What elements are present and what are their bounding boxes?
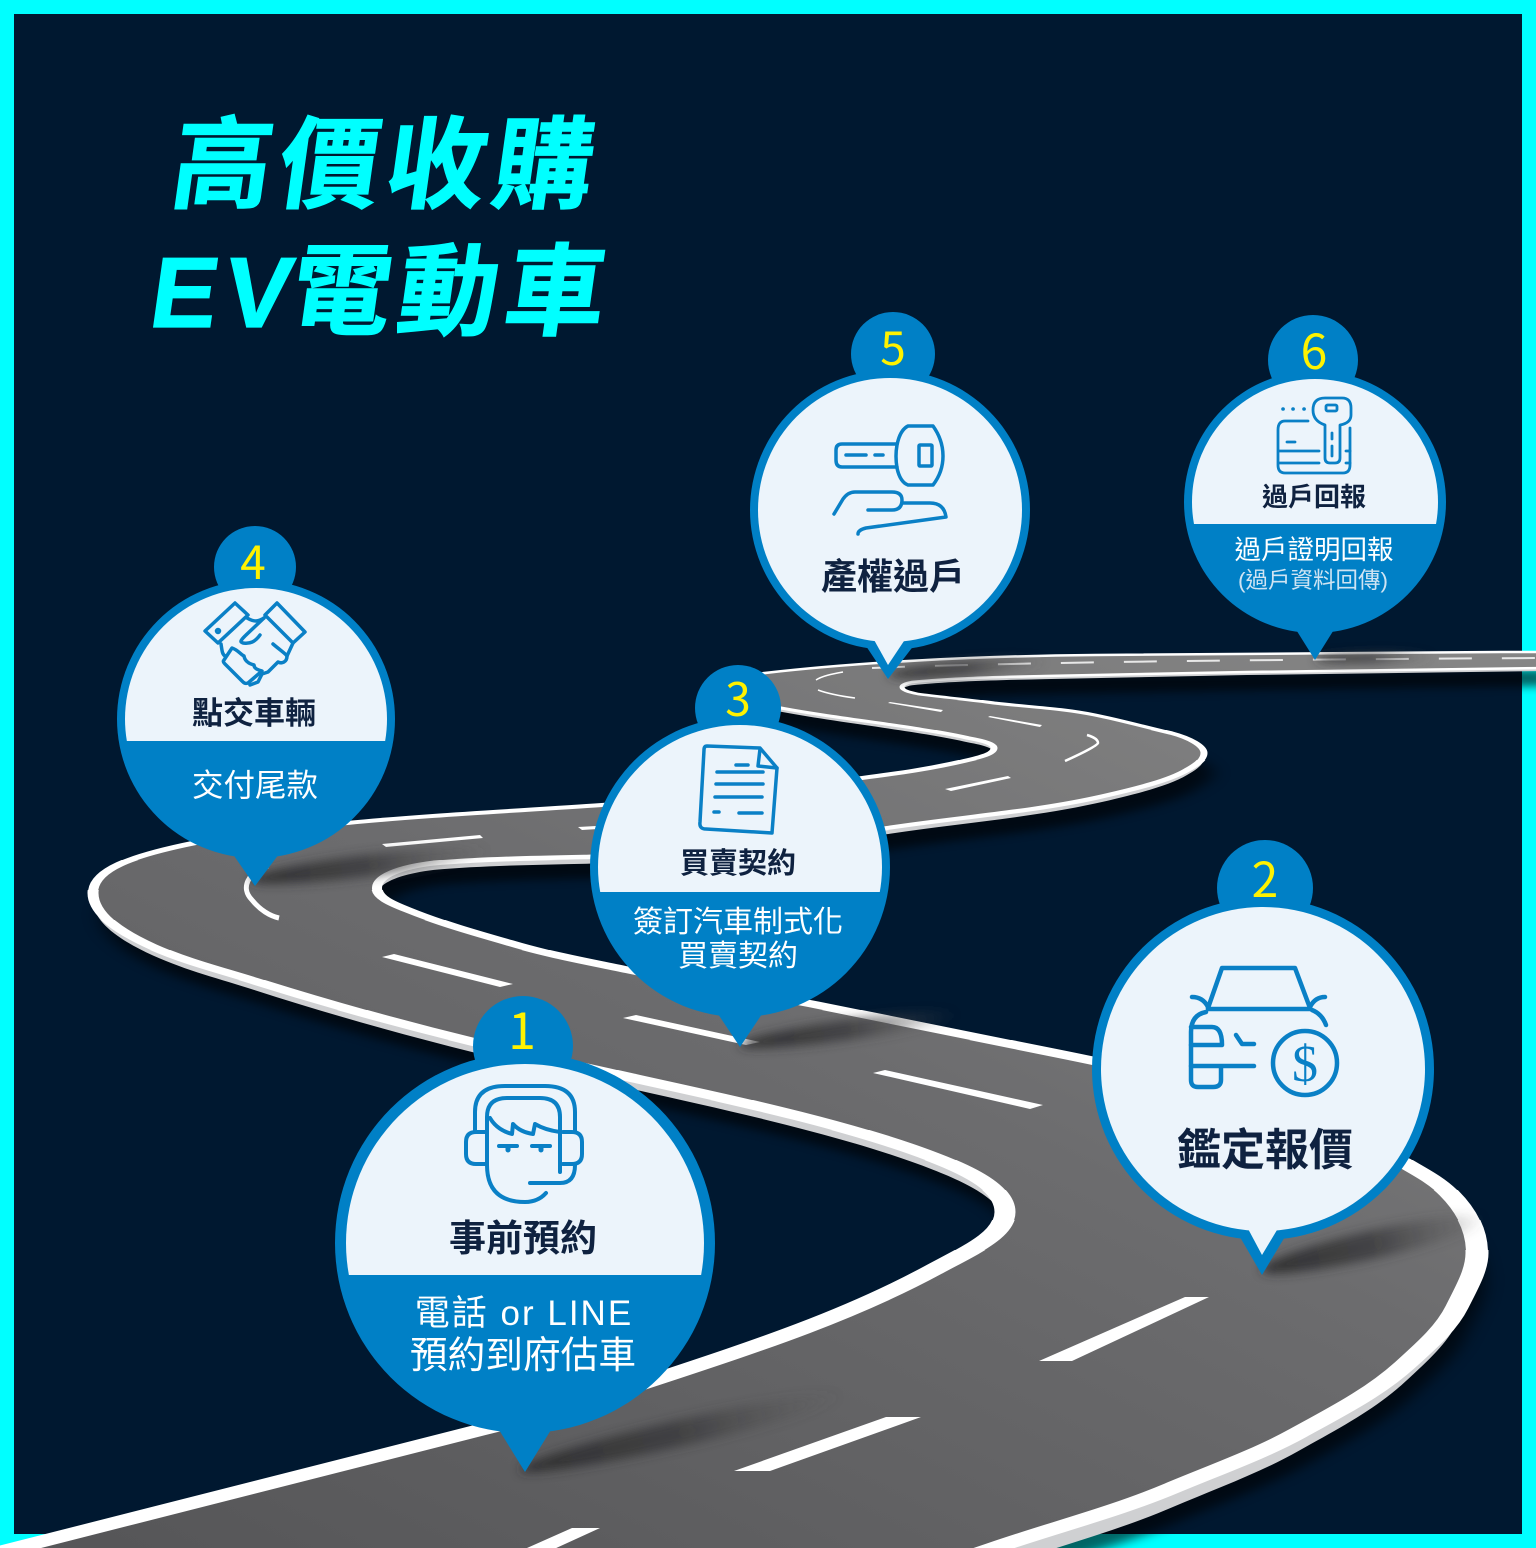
pin 2: 鑑定報價 [1092, 840, 1434, 1275]
sub text line 2: 預約到府估車 [410, 1334, 636, 1376]
pin 3: 買賣契約 [590, 664, 890, 1047]
pin 4: 點交車輛 [117, 526, 395, 886]
curved dashes [246, 672, 1098, 918]
winding road [0, 652, 1536, 1548]
title: 高價收購 [165, 110, 609, 222]
title [144, 110, 621, 349]
icon: car and dollar [1191, 968, 1337, 1095]
heading: 事前預約 [449, 1218, 597, 1259]
pin 6: 過戶回報 [1184, 313, 1446, 660]
number 4: 4 [240, 527, 266, 593]
icon: key and card [1278, 398, 1351, 473]
icon: handshake [205, 603, 305, 685]
heading: 鑑定報價 [1177, 1126, 1353, 1175]
sub text: 電話 or LINE [415, 1294, 633, 1333]
number 1: 1 [508, 992, 536, 1064]
icon: headset agent [466, 1086, 582, 1202]
far road dashes [872, 658, 1536, 668]
number 3: 3 [725, 664, 751, 730]
number 6: 6 [1301, 313, 1327, 383]
road side depth [0, 655, 1536, 1548]
heading: 買賣契約 [680, 847, 796, 880]
sub text: 簽訂汽車制式化 [633, 906, 843, 939]
road centre dashes [382, 702, 1209, 1548]
heading: 點交車輛 [192, 696, 316, 731]
sub text line 2: 買賣契約 [678, 940, 798, 973]
pin 1: 事前預約 [335, 992, 715, 1472]
pin 5: 產權過戶 [750, 312, 1030, 679]
heading: 產權過戶 [821, 556, 965, 597]
sub text: 過戶證明回報 [1234, 535, 1394, 565]
road shadow [8, 670, 1536, 1548]
sub text small: (過戶資料回傳) [1238, 568, 1388, 593]
title: EV [144, 237, 307, 349]
sub text: 交付尾款 [192, 767, 318, 803]
road surface and white edge lines [0, 652, 1536, 1548]
number 2: 2 [1252, 841, 1278, 911]
title: 電動車 [284, 237, 621, 349]
icon: contract document [700, 746, 777, 833]
pin shadows on road [249, 652, 1489, 1483]
icon: key in hand [834, 426, 946, 534]
heading: 過戶回報 [1262, 482, 1366, 512]
dollar sign: $ [1292, 1036, 1318, 1093]
number 5: 5 [880, 313, 906, 379]
